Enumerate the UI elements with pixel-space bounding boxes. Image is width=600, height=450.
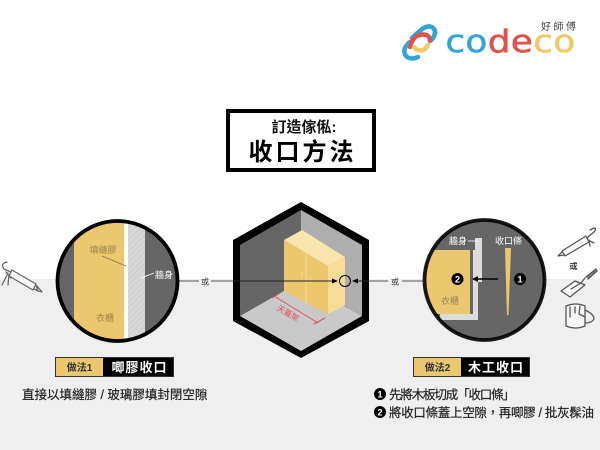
dimension label: 天蓋架 (275, 303, 301, 323)
method 2 tag: 做法2 (425, 361, 451, 374)
icon: trowel (561, 269, 597, 297)
badge 2: 2 (455, 274, 460, 284)
label: wall: 牆身 (449, 235, 467, 246)
logo wordmark: codeco (446, 23, 576, 59)
method 1 tag: 唧膠收口 (111, 360, 168, 375)
cabinet surface (74, 219, 124, 343)
icon: caulking gun right (558, 228, 596, 256)
method 1 description: 直接以填縫膠 / 玻璃膠填封閉空隙 (22, 387, 207, 402)
method 1 tag: 做法1 (67, 361, 93, 374)
or label icons: 或 (570, 261, 578, 271)
title box (228, 111, 374, 170)
step 2: 2 (377, 408, 383, 418)
label: filler: 填縫膠 (89, 244, 117, 255)
right wall (301, 210, 362, 316)
circle: method 1 (56, 219, 180, 343)
wall L strip (440, 238, 482, 320)
sight line left with arrow (233, 278, 338, 284)
title small: 訂造傢俬: (272, 118, 336, 136)
filler strip (128, 219, 145, 343)
label: wall: 牆身 (155, 269, 173, 280)
title main: 收口方法 (248, 138, 356, 166)
connector label left: 或 (201, 276, 209, 286)
step 1: 1 (377, 390, 383, 400)
method 2 tag (414, 358, 530, 376)
trim strip (505, 248, 511, 315)
wardrobe (284, 230, 345, 314)
arrow (472, 276, 498, 282)
arrow right (352, 278, 369, 284)
method 2 steps (374, 387, 594, 420)
label: trim: 收口條 (495, 235, 522, 246)
step 2: 將收口條蓋上空隙，再唧膠 / 批灰髹油 (389, 405, 594, 420)
floor (240, 281, 362, 351)
label: wardrobe: 衣櫃 (96, 312, 114, 323)
left wall (240, 210, 301, 316)
connector label right: 或 (391, 276, 399, 286)
badge 1: 1 (517, 274, 523, 284)
circle: method 2 (423, 219, 547, 343)
connector line left (179, 280, 233, 282)
logo (404, 20, 578, 59)
label: wardrobe: 衣櫃 (441, 295, 459, 306)
step 1: 先將木板切成「收口條」 (389, 387, 515, 402)
dimension line (272, 293, 325, 324)
cabinet (423, 250, 470, 314)
method 2 tag: 木工收口 (468, 360, 524, 375)
hexagon room diagram (233, 202, 369, 358)
gap marker (340, 276, 350, 286)
logo chinese name: 好師傅 (541, 20, 578, 33)
connector line right (369, 280, 423, 282)
icon: paint can (566, 304, 594, 328)
method 1 tag (56, 358, 174, 376)
icon: caulking gun left (2, 262, 42, 292)
icon: chain link (404, 26, 435, 58)
